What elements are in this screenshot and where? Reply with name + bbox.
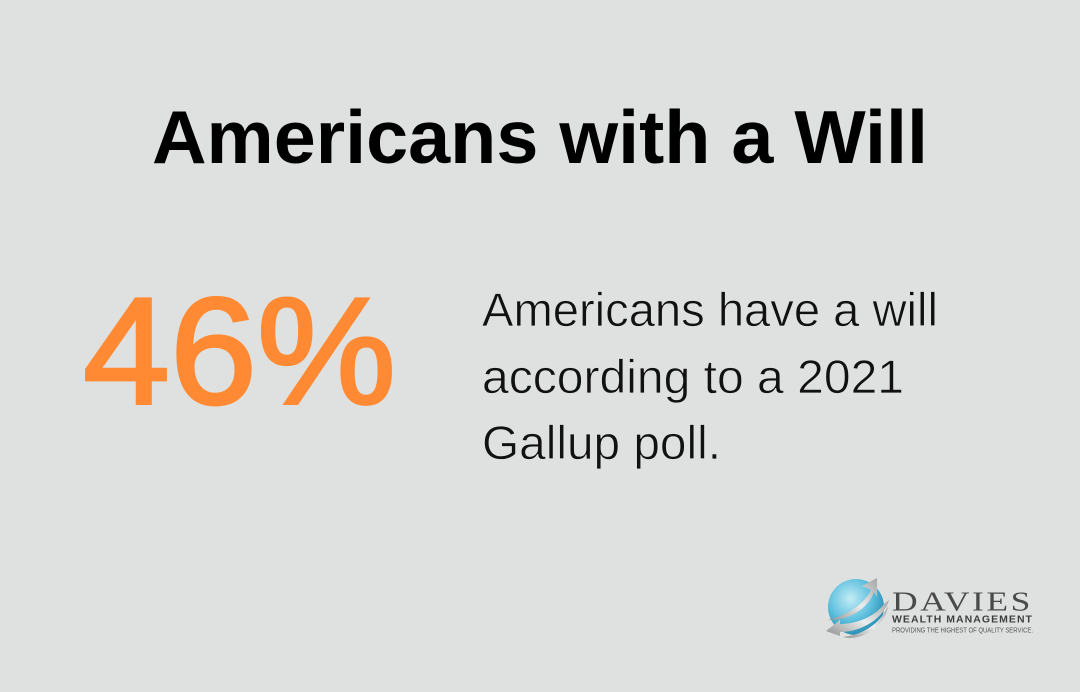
title: Americans with a Will [152,95,928,179]
wordmark: DAVIES: DAVIES [892,586,1033,616]
description text [482,284,938,470]
tagline: PROVIDING THE HIGHEST OF QUALITY SERVICE. [892,626,1033,634]
description text: Americans have a will [482,284,938,337]
icon: globe with arrows [826,578,889,638]
big statistic: 46%: 46% [83,266,396,436]
description text: Gallup poll. [482,417,721,470]
logo: Davies Wealth Management [826,578,1033,638]
wordmark: WEALTH MANAGEMENT: WEALTH MANAGEMENT [892,614,1033,626]
description text: according to a 2021 [482,351,904,404]
